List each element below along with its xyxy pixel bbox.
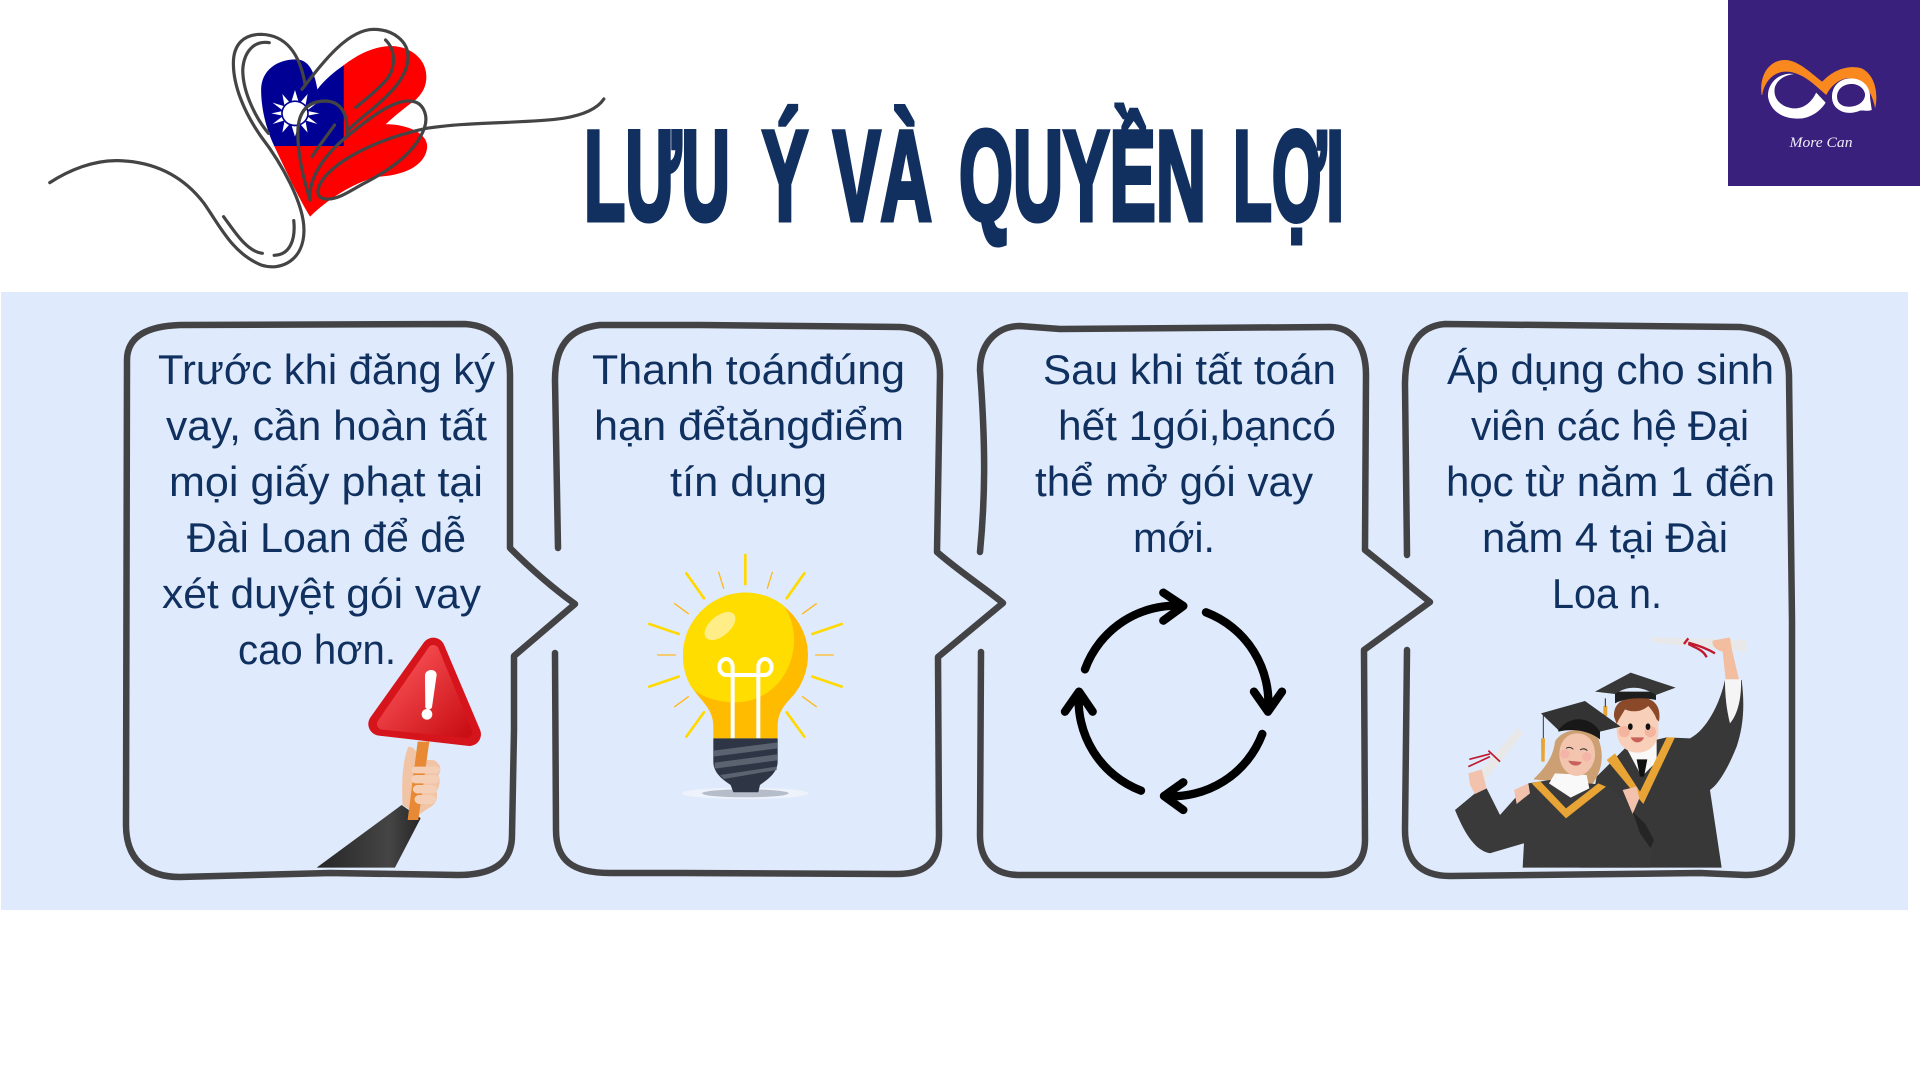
text: callout 3 [1035, 346, 1336, 561]
text: callout 3: mới. [1133, 514, 1215, 561]
panel: callout 1 outline [126, 324, 575, 877]
icon: graduating students [1455, 637, 1747, 868]
text: callout 1: mọi giấy phạt tại [169, 458, 483, 505]
text: callout 4: năm 4 tại Đài [1482, 514, 1728, 561]
text: LỢI [1233, 105, 1344, 248]
icon: light bulb [649, 555, 842, 799]
text: callout 1: cao hơn. [238, 626, 396, 673]
text: callout 1 [158, 346, 495, 673]
logo: More Can: More Can [1788, 135, 1852, 151]
panel: light blue band [1, 292, 1908, 910]
text: callout 1: Trước khi đăng ký [158, 346, 495, 393]
logo: More Can [1728, 0, 1920, 186]
text: callout 1: vay, cần hoàn tất [166, 402, 487, 449]
text: callout 4: Áp dụng cho sinh [1447, 346, 1774, 393]
text: callout 2: hạn đểtăngđiểm [594, 402, 904, 449]
text: callout 4 [1446, 346, 1775, 617]
title: Ý [762, 105, 808, 248]
icon: circular arrows [1065, 593, 1282, 810]
title: VÀ [833, 105, 932, 248]
panel: callout 3 outline [980, 326, 1430, 875]
text: callout 3: Sau khi tất toán [1043, 346, 1336, 393]
text: callout 4: viên các hệ Đại [1471, 402, 1749, 449]
text: callout 1: Đài Loan để dễ [187, 514, 466, 561]
text: callout 3: hết 1gói,bạncó [1058, 402, 1336, 449]
text: callout 1: xét duyệt gói vay [162, 570, 481, 617]
text: callout 2 [592, 346, 905, 505]
text: callout 4: học từ năm 1 đến [1446, 458, 1775, 505]
title [584, 105, 1344, 248]
panel: callout 4 outline [1405, 324, 1792, 876]
icon: Taiwan flag heart with line scribble [50, 29, 604, 267]
text: callout 2: tín dụng [670, 458, 827, 505]
icon: hand holding warning sign [317, 649, 469, 868]
text: callout 4: Loa n. [1552, 570, 1662, 617]
title: LƯU [584, 105, 730, 248]
text: callout 2: Thanh toánđúng [592, 346, 905, 393]
panel: callout 2 outline [555, 325, 1003, 874]
text: callout 3: thể mở gói vay [1035, 458, 1313, 505]
title: QUYỀN [959, 105, 1206, 248]
